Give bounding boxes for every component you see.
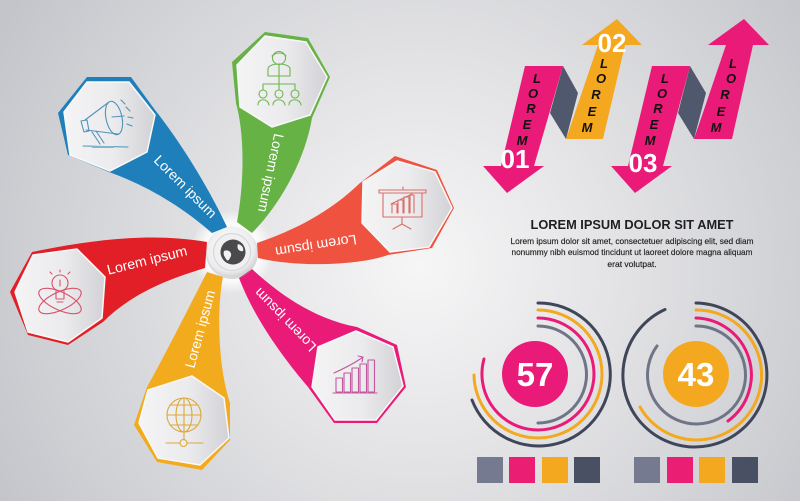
body text: Lorem ipsum dolor sit amet, consectetuer adipiscing elit, sed diam [510, 236, 754, 246]
arrow 02: orange up [566, 19, 642, 139]
label: red petal text: Lorem ipsum [105, 242, 189, 278]
petal: orange globe [134, 272, 230, 470]
circle: 43 [663, 341, 729, 407]
icon: bulb and atom [35, 270, 85, 319]
number: 01: 01 [501, 144, 529, 174]
radial chart: 43 [623, 303, 767, 447]
petal: red atom bulb [10, 237, 207, 345]
label: orange petal text: Lorem ipsum [182, 288, 218, 370]
icon: network globe [166, 398, 203, 446]
body text [510, 236, 754, 269]
text: LOREM: LOREM [711, 56, 737, 135]
icon: presentation board [379, 187, 426, 229]
circle: 57: 57 [517, 356, 553, 393]
petal: green people [232, 32, 330, 233]
number: 03: 03 [629, 148, 657, 178]
radial chart: 57 [472, 303, 610, 446]
arrow 01: pink down [483, 66, 563, 193]
arrow 04: pink up [694, 19, 769, 139]
text: LOREM: LOREM [517, 71, 541, 148]
arrow 03: pink down [611, 66, 690, 193]
center globe hub [206, 227, 258, 279]
fold: gray [678, 66, 706, 139]
legend swatches: right [634, 457, 758, 483]
legend swatches: left [477, 457, 600, 483]
icon: bar chart [333, 356, 377, 393]
text: LOREM: LOREM [582, 56, 608, 135]
number: 02: 02 [598, 28, 626, 58]
label: blue petal text: Lorem ipsum [151, 152, 220, 221]
petal: blue megaphone [58, 77, 227, 233]
icon: megaphone [81, 100, 133, 148]
petal: pink chart [239, 269, 406, 423]
label: coral petal text: Lorem ipsum [274, 232, 358, 260]
label: green petal text: Lorem ipsum [255, 132, 287, 214]
fold: gray [550, 66, 578, 139]
heading: LOREM IPSUM DOLOR SIT AMET [530, 218, 734, 232]
label: pink petal text: Lorem ipsum [251, 285, 319, 355]
circle: 57 [502, 341, 568, 407]
body text: erat volutpat. [607, 259, 657, 269]
circle: 43: 43 [678, 356, 714, 393]
petal: coral presentation [257, 156, 454, 264]
text: LOREM: LOREM [645, 71, 669, 148]
hub glow [190, 210, 274, 294]
icon: people hierarchy [258, 52, 301, 105]
body text: nonummy nibh euismod tincidunt ut laoreet dolore magna aliquam [512, 247, 752, 257]
